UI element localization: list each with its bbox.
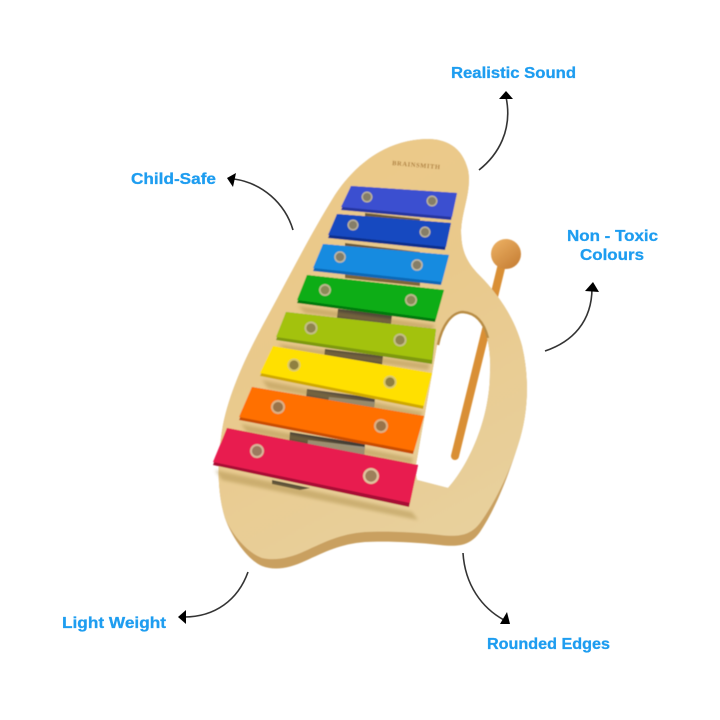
label: Non - Toxic Colours: Colours xyxy=(580,247,644,264)
brand mark: BRAINSMITH xyxy=(392,160,441,171)
bar 3: sky blue xyxy=(313,244,449,285)
mallet head xyxy=(491,239,521,269)
arrow: to Light Weight xyxy=(178,572,248,624)
bar 5: lime xyxy=(276,312,436,364)
bar 7: orange xyxy=(239,387,424,454)
arrow: to Non-Toxic Colours xyxy=(545,282,599,351)
arrow: to Child-Safe xyxy=(227,173,293,230)
handle cutout inner rim xyxy=(438,312,488,345)
arrow: to Rounded Edges xyxy=(463,553,510,624)
xylophone product illustration xyxy=(213,139,527,568)
arrow: to Realistic Sound xyxy=(479,91,513,170)
board edge xyxy=(219,139,527,568)
bar shadows xyxy=(215,306,435,520)
label: Light Weight: Light Weight xyxy=(62,615,167,632)
label: Realistic Sound: Realistic Sound xyxy=(451,65,576,82)
label: Non - Toxic Colours xyxy=(567,228,658,264)
bar 8: red xyxy=(213,428,418,507)
bar 2: dark blue xyxy=(328,214,451,250)
bar 6: yellow xyxy=(260,346,432,409)
label: Child-Safe: Child-Safe xyxy=(131,171,216,188)
label: Rounded Edges: Rounded Edges xyxy=(487,636,610,653)
bar 1: indigo xyxy=(341,186,457,220)
label: Non - Toxic Colours: Non - Toxic xyxy=(567,228,658,245)
wooden board with handle cutout xyxy=(219,139,527,559)
mallet stick xyxy=(455,264,502,456)
bar 4: green xyxy=(297,275,444,322)
dark rails under bars xyxy=(272,213,420,490)
